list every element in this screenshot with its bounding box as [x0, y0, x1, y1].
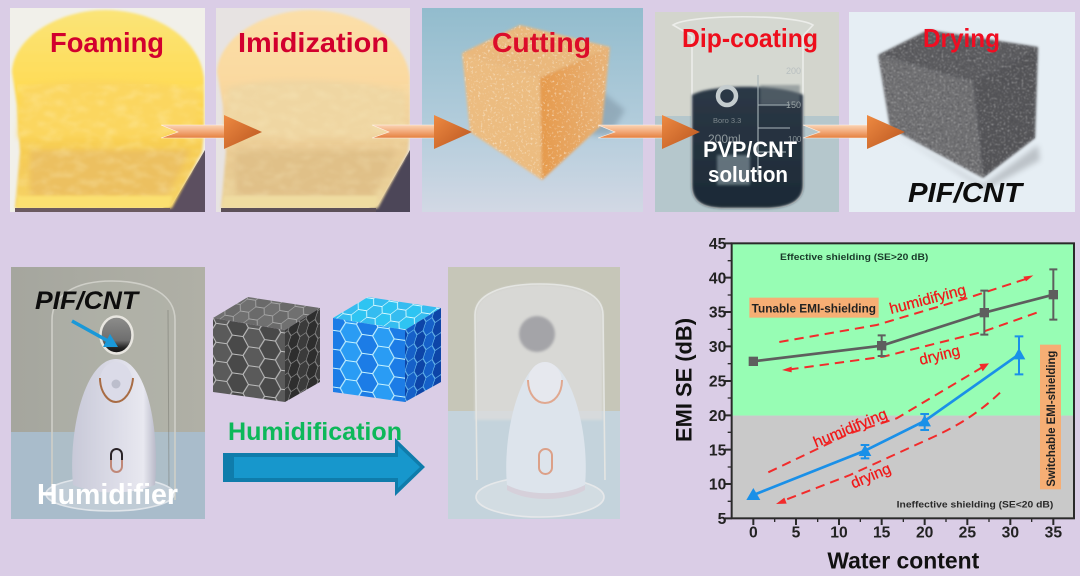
label: PIF/CNT product: PIF/CNT — [908, 177, 1025, 208]
y-axis tick labels — [709, 236, 727, 528]
label: lower drying: drying — [848, 460, 894, 492]
icon: wet foam cube — [333, 297, 441, 402]
x-axis tick labels: 25 — [959, 525, 976, 542]
chart: EMI SE vs water content — [671, 236, 1074, 573]
arrow: dip-coating to drying — [803, 115, 905, 149]
arrow: pointer to sample — [72, 321, 118, 347]
y-axis tick labels: 45 — [709, 236, 727, 253]
series: tunable grey — [749, 269, 1058, 366]
y-axis title: EMI SE (dB) — [671, 318, 696, 442]
label: upper drying: drying — [918, 342, 962, 369]
x-axis tick labels: 10 — [830, 525, 848, 542]
x-axis tick labels: 5 — [792, 525, 801, 542]
beaker: 200ml — [708, 132, 741, 146]
panel: foaming photo — [10, 8, 205, 212]
axes frame — [725, 243, 1074, 525]
label: imidization: Imidization — [238, 27, 389, 58]
beaker: Boro 3.3 — [713, 116, 741, 125]
label: PVP/CNT solution: PVP/CNT — [703, 137, 798, 162]
dashed arrow: lower humidifying — [768, 363, 989, 472]
x-axis tick labels: 30 — [1002, 525, 1019, 542]
label: PVP/CNT solution — [703, 137, 798, 187]
panel: drying photo — [849, 12, 1075, 212]
panel: humidifier photo after — [448, 267, 620, 519]
beaker: 150 — [786, 100, 801, 110]
label: lower humidifying: humidifying — [811, 406, 890, 451]
label: ineffective shielding: Ineffective shielding (SE<20 dB) — [897, 500, 1053, 510]
x-axis tick labels — [749, 525, 1062, 542]
y-axis tick labels: 40 — [709, 270, 727, 287]
panel: dip-coating beaker photo — [655, 12, 839, 212]
panel: imidization photo — [216, 8, 410, 212]
arrow: humidification — [223, 438, 425, 496]
callout: tunable EMI-shielding — [749, 298, 879, 318]
label: effective shielding: Effective shielding (SE>20 dB) — [780, 252, 928, 262]
y-axis tick labels: 10 — [709, 477, 727, 494]
arrow: foaming to imidization — [161, 115, 262, 149]
label: foaming: Foaming — [50, 27, 164, 58]
y-axis tick labels: 5 — [718, 511, 727, 528]
beaker: 100 — [788, 135, 802, 144]
x-axis tick labels: 20 — [916, 525, 934, 542]
beaker — [673, 17, 813, 208]
panel: humidifier photo before — [11, 267, 205, 519]
zone: effective shielding — [732, 243, 1074, 416]
y-axis tick labels: 20 — [709, 408, 727, 425]
y-axis tick labels: 15 — [709, 443, 727, 460]
label: dip-coating: Dip-coating — [682, 23, 818, 53]
grey foam cube — [878, 30, 1038, 178]
beaker: 200 — [786, 66, 801, 76]
label: upper humidifying: humidifying — [888, 282, 968, 318]
label: humidification: Humidification — [228, 418, 402, 446]
icon: dry foam cube — [213, 297, 320, 402]
humidifier body — [72, 359, 156, 492]
series: switchable blue — [746, 336, 1025, 500]
label: cutting: Cutting — [492, 27, 591, 58]
sample holder ring — [100, 316, 132, 354]
y-axis tick labels: 25 — [709, 374, 727, 391]
x-axis title: Water content — [827, 547, 980, 573]
x-axis tick labels: 15 — [873, 525, 891, 542]
arrow: cutting to dip-coating — [598, 115, 700, 149]
callout: tunable EMI-shielding: Tunable EMI-shielding — [752, 303, 876, 316]
arrow: imidization to cutting — [372, 115, 472, 149]
dashed arrow: lower drying — [776, 393, 1000, 504]
x-axis tick labels: 35 — [1045, 525, 1062, 542]
label: PIF/CNT on jar: PIF/CNT — [35, 287, 141, 315]
callout: switchable EMI-shielding — [1040, 345, 1061, 489]
label: PVP/CNT solution: solution — [708, 162, 788, 187]
panel: cutting photo — [422, 8, 643, 212]
callout: switchable EMI-shielding: Switchable EMI-shielding — [1045, 351, 1058, 487]
dashed arrow: upper humidifying — [779, 275, 1033, 342]
y-axis tick labels: 30 — [709, 339, 727, 356]
humidifier in fog — [506, 362, 586, 499]
x-axis tick labels: 0 — [749, 525, 758, 542]
zone: ineffective shielding — [732, 416, 1074, 518]
y-axis tick labels: 35 — [709, 305, 727, 322]
foam cube — [462, 25, 610, 180]
label: drying: Drying — [923, 23, 1000, 53]
label: humidifier: Humidifier — [37, 479, 178, 511]
dashed arrow: upper drying — [782, 313, 1037, 372]
